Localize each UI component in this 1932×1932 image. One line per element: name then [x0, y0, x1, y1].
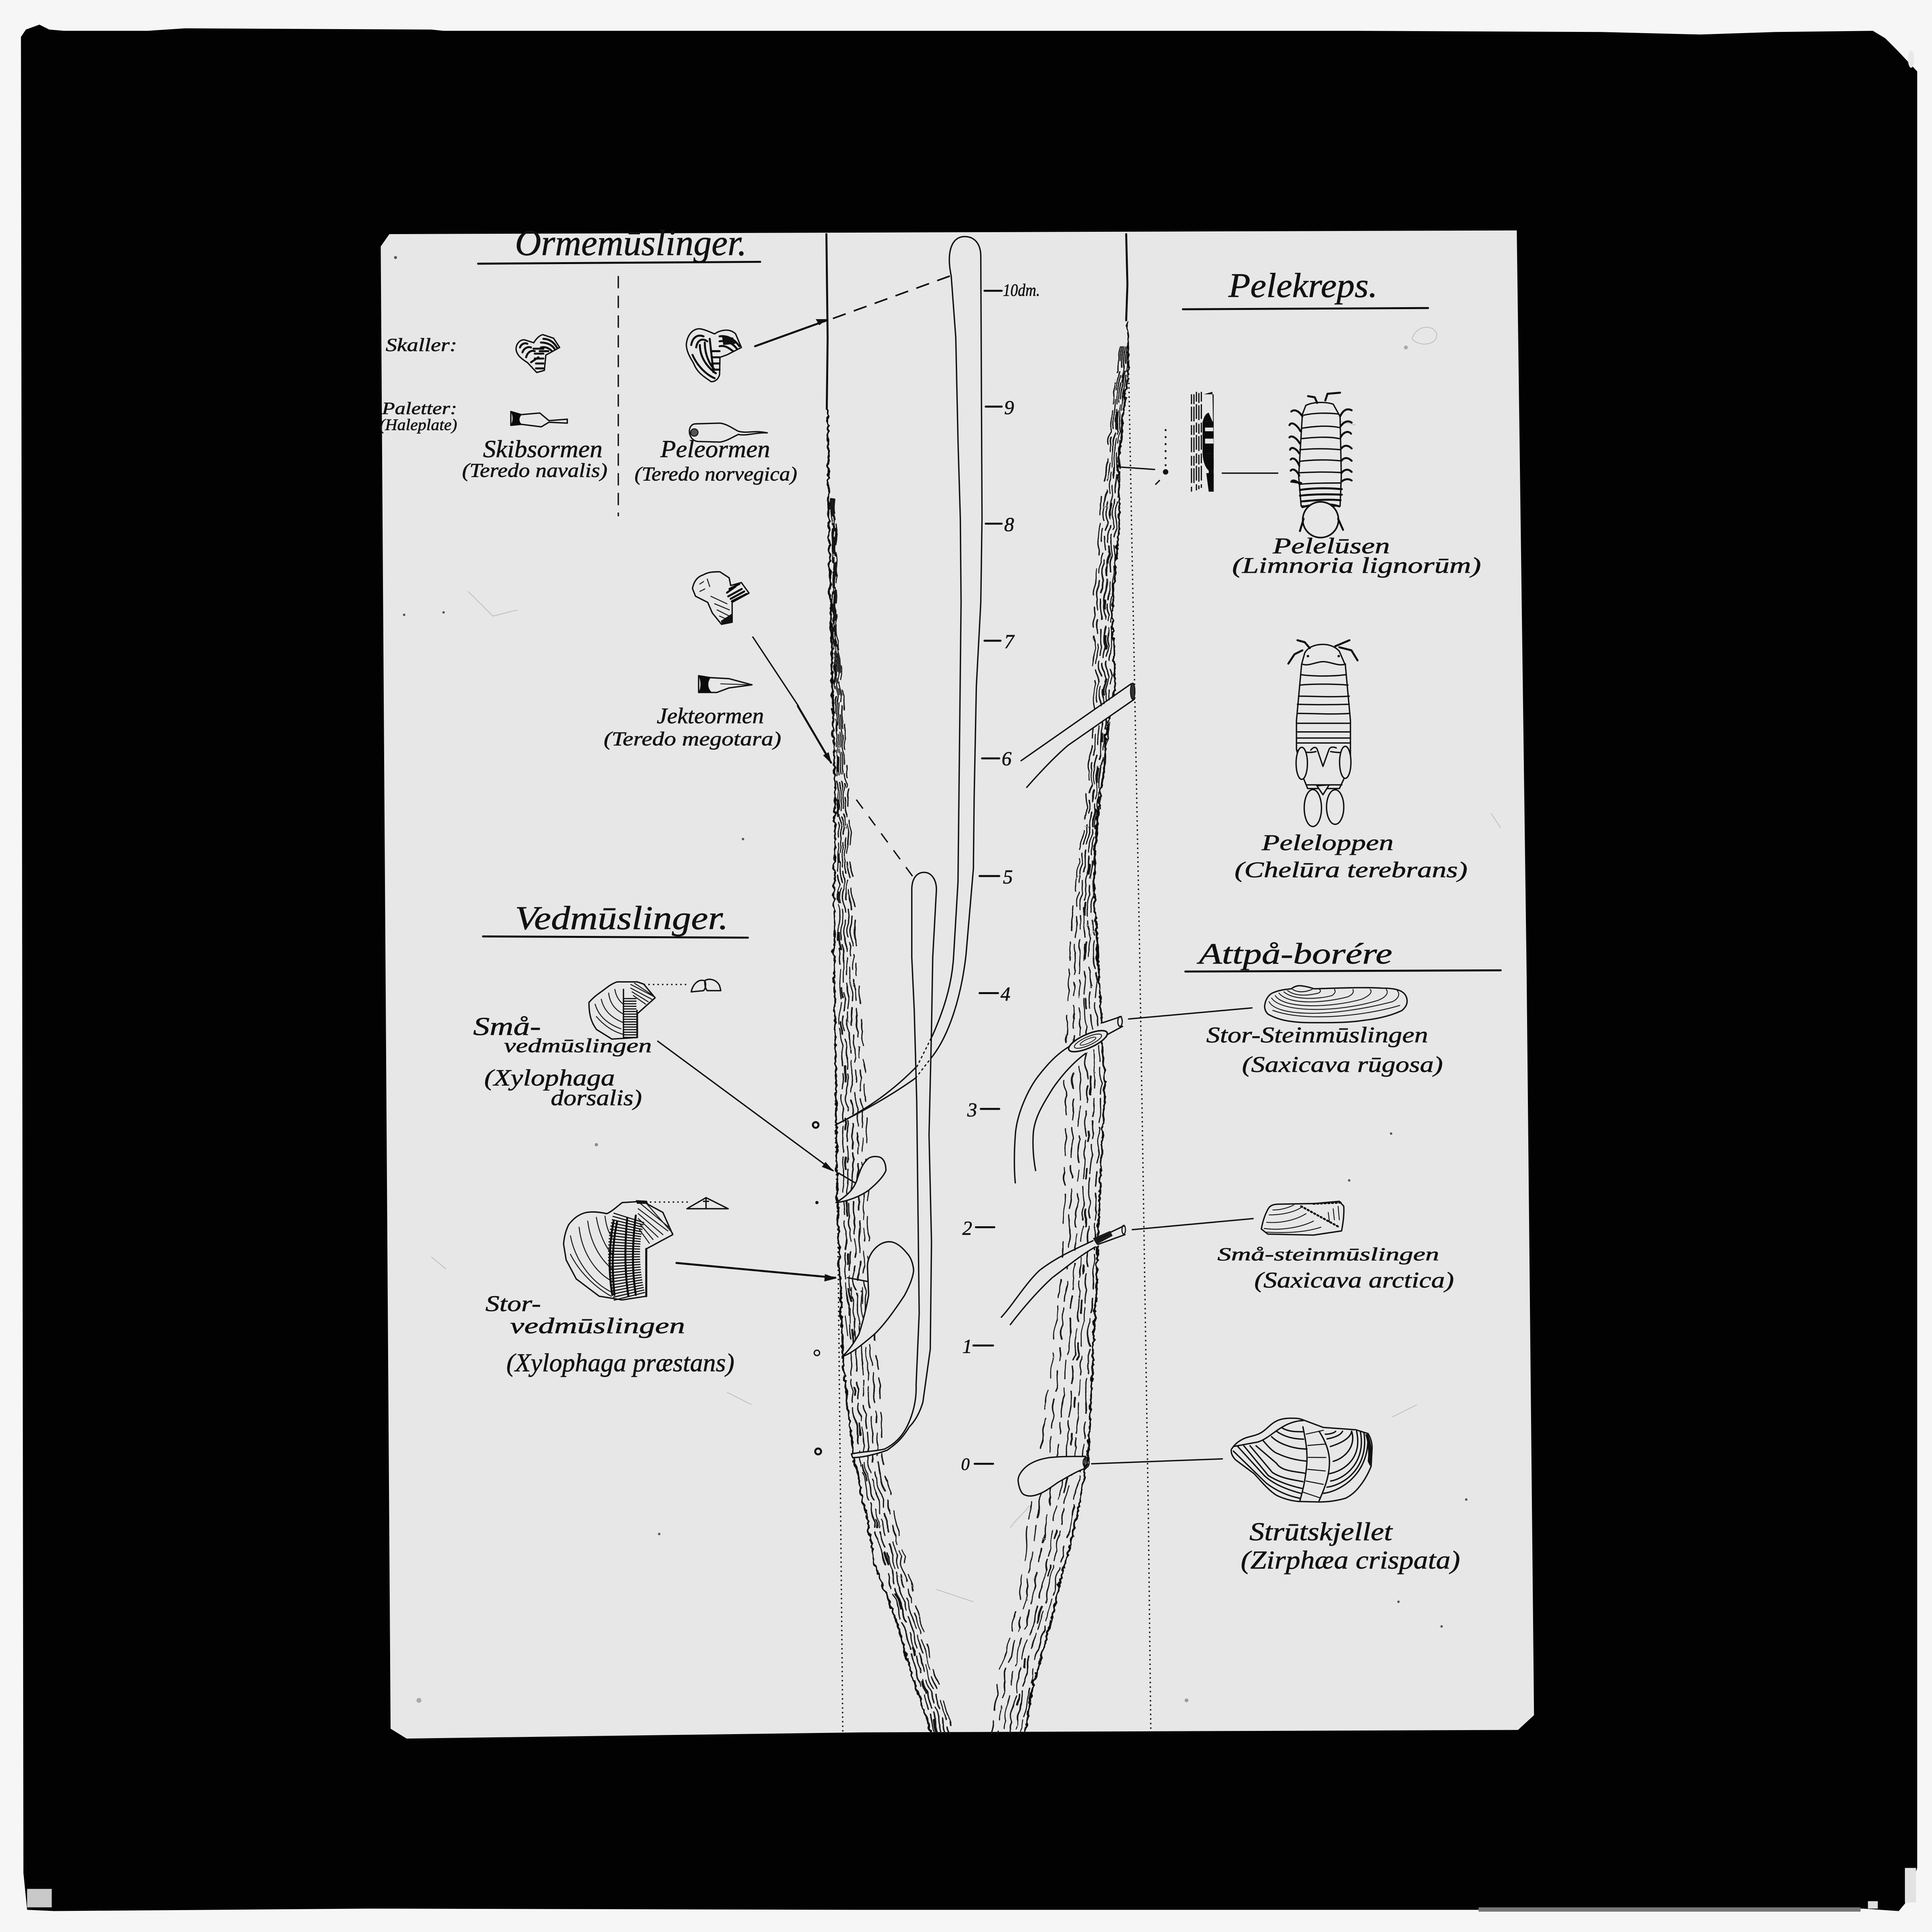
label: Paletter (Haleplate) — [379, 399, 457, 434]
label: Jekteormen (Teredo megotara): (Teredo megotara) — [604, 728, 781, 750]
paper panel — [381, 231, 1534, 1739]
tick 5 — [979, 866, 1013, 888]
label: Små-vedmuslingen (Xylophaga dorsalis): dorsalis) — [551, 1086, 642, 1111]
arrow: Teredo megotara to pile — [753, 637, 914, 878]
label: Peleormen (Teredo norvegica) — [635, 436, 797, 485]
label: Peleormen (Teredo norvegica): (Teredo norvegica) — [635, 463, 797, 485]
icon: dorsal view, small shell — [644, 979, 721, 992]
label: Skibsormen (Teredo navalis): (Teredo navalis) — [462, 459, 608, 481]
tick 9: 9 — [1004, 397, 1014, 418]
burrow: Saxicava arctica tube — [1001, 1225, 1125, 1324]
dotted water line left — [835, 1134, 843, 1731]
wooden pile: left section hatching — [829, 498, 951, 1731]
icon: Limnoria lignorum isopod — [1289, 393, 1352, 538]
tick 0 — [961, 1455, 993, 1474]
icon: dorsal view, large shell — [651, 1198, 728, 1209]
icon: shell of Xylophaga dorsalis — [589, 982, 655, 1039]
tick 0: 0 — [961, 1455, 970, 1474]
label: Pelelusen (Limnoria lignorum): Pelelūsen — [1272, 534, 1390, 558]
divider between species — [618, 276, 619, 516]
label: Peleloppen (Chelura terebrans): (Chelūra terebrans) — [1235, 858, 1468, 882]
tick 3 — [967, 1099, 999, 1121]
dotted crossing of the two burrows — [916, 1035, 933, 1078]
tick 8: 8 — [1004, 513, 1014, 535]
pile right edge, top straight section — [1126, 234, 1127, 320]
label: Stor-Steinmuslingen (Saxicava rugosa) — [1206, 1023, 1443, 1077]
tick 2: 2 — [962, 1217, 972, 1239]
label: Stor-vedmuslingen (Xylophaga praestans): Stor- — [485, 1291, 541, 1316]
wooden pile: right section hatching — [989, 345, 1126, 1731]
tick 1: 1 — [962, 1335, 972, 1357]
icon: Saxicava rugosa shell — [1265, 986, 1407, 1023]
icon: enlarged wood section with borings — [1192, 392, 1214, 491]
icon: palette of Teredo navalis — [511, 412, 567, 427]
label: Stor-Steinmuslingen (Saxicava rugosa): (Saxicava rūgosa) — [1242, 1052, 1443, 1077]
label: Skibsormen (Teredo navalis) — [462, 436, 608, 481]
pointer to enlarged wood section — [1119, 430, 1168, 484]
label: Stor-vedmuslingen (Xylophaga praestans) — [485, 1291, 734, 1377]
label: Peleormen (Teredo norvegica): Peleormen — [660, 436, 770, 463]
icon: Saxicava arctica shell — [1261, 1201, 1344, 1235]
section: Pelekreps heading — [1183, 266, 1428, 309]
label: Stor-vedmuslingen (Xylophaga praestans): (Xylophaga præstans) — [506, 1349, 734, 1377]
label: Jekteormen (Teredo megotara): Jekteormen — [657, 704, 764, 728]
icon: palette of Teredo megotara — [699, 676, 752, 693]
tick 5: 5 — [1003, 866, 1013, 888]
tick 9 — [986, 397, 1014, 418]
label: Sma-steinmuslingen (Saxicava arctica) — [1218, 1245, 1454, 1293]
tick 6 — [982, 748, 1012, 770]
depth scale — [961, 280, 1040, 1474]
label: Pelelusen (Limnoria lignorum): (Limnoria lignorūm) — [1232, 553, 1481, 578]
tick 7: 7 — [1004, 631, 1015, 653]
label: Peleloppen (Chelura terebrans) — [1235, 831, 1468, 882]
icon: Chelura terebrans amphipod — [1288, 640, 1358, 827]
tick 10 dm — [985, 280, 1040, 300]
tick 7 — [985, 631, 1015, 653]
arrow: Teredo norvegica to pile — [755, 276, 950, 346]
tick 8 — [986, 513, 1014, 535]
icon: shell of Teredo navalis — [516, 335, 560, 373]
tick 2 — [962, 1217, 995, 1239]
section: Pelekreps heading: Pelekreps. — [1228, 266, 1377, 304]
burrow: large Xylophaga — [842, 1242, 914, 1357]
label: Peleloppen (Chelura terebrans): Peleloppen — [1261, 831, 1393, 855]
paper specks and fibres — [394, 256, 1501, 1703]
burrow: small Xylophaga — [836, 1156, 886, 1203]
tick 4 — [979, 983, 1010, 1005]
section: Ormemuslinger heading: Ormemūslinger. — [515, 222, 747, 263]
tick 1 — [962, 1335, 993, 1357]
tick 4: 4 — [1001, 983, 1010, 1005]
section: Attpa-borere heading — [1185, 937, 1501, 971]
tick 3: 3 — [967, 1099, 977, 1121]
icon: palette of Teredo norvegica — [689, 423, 767, 442]
line to Limnoria — [1222, 473, 1278, 474]
icon: Zirphaea crispata shell — [1231, 1418, 1372, 1502]
label: Små-vedmuslingen (Xylophaga dorsalis): (Xylophaga — [484, 1065, 615, 1091]
icon: shell of Teredo norvegica — [686, 329, 741, 382]
label: Stor-Steinmuslingen (Saxicava rugosa): Stor-Steinmūslingen — [1206, 1023, 1428, 1048]
label: Skaller: Skaller: — [386, 335, 457, 355]
icon: shell of Teredo megotara — [693, 572, 749, 625]
arrow: small Xylophaga to burrow — [658, 1041, 834, 1172]
section: Attpa-borere heading: Attpå-borére — [1196, 937, 1392, 970]
label: Strutskjellet (Zirphaea crispata): (Zirphæa crispata) — [1241, 1546, 1460, 1575]
tick 10 dm: 10dm. — [1003, 280, 1040, 300]
label: Stor-vedmuslingen (Xylophaga praestans): vedmūslingen — [510, 1314, 685, 1338]
label: Strutskjellet (Zirphaea crispata) — [1241, 1518, 1460, 1575]
label: Små-vedmuslingen (Xylophaga dorsalis): vedmūslingen — [504, 1035, 652, 1057]
label: Små-vedmuslingen (Xylophaga dorsalis): Små- — [473, 1012, 541, 1041]
label: Jekteormen (Teredo megotara) — [604, 704, 781, 750]
arrow: large Xylophaga to burrow — [677, 1263, 837, 1281]
line to Saxicava arctica shell — [1132, 1219, 1253, 1229]
label: Små-vedmuslingen (Xylophaga dorsalis) — [473, 1012, 652, 1111]
label: Paletter (Haleplate): (Haleplate) — [379, 416, 457, 434]
wooden pile: left edge — [827, 409, 930, 1731]
stick fragment near tick 6 — [1021, 683, 1135, 787]
line to Saxicava rugosa shell — [1129, 1008, 1252, 1019]
label: Paletter (Haleplate): Paletter: — [381, 399, 457, 418]
pile left edge, top straight section — [827, 234, 828, 409]
section: Vedmuslinger heading: Vedmūslinger. — [515, 900, 728, 937]
line to Zirphaea shell — [1092, 1459, 1222, 1464]
burrow: Teredo norvegica — [835, 237, 982, 1125]
burrow: Teredo megotara — [851, 872, 936, 1458]
dotted water line right — [1129, 370, 1151, 1731]
tick 6: 6 — [1002, 748, 1012, 770]
label: Skibsormen (Teredo navalis): Skibsormen — [483, 436, 602, 463]
pile marks on the left — [813, 1122, 821, 1454]
section: Vedmuslinger heading — [483, 900, 748, 937]
icon: shell of Xylophaga praestans — [564, 1200, 673, 1300]
label: Pelelusen (Limnoria lignorum) — [1232, 534, 1481, 578]
label: Sma-steinmuslingen (Saxicava arctica): (Saxicava arctica) — [1254, 1268, 1454, 1293]
burrow: Zirphaea — [1018, 1456, 1089, 1496]
burrow: Saxicava rugosa tube — [1014, 1016, 1123, 1183]
label: Sma-steinmuslingen (Saxicava arctica): Små-steinmūslingen — [1218, 1245, 1439, 1265]
label: Strutskjellet (Zirphaea crispata): Strūtskjellet — [1249, 1518, 1393, 1546]
wooden pile: right edge — [1024, 320, 1127, 1731]
